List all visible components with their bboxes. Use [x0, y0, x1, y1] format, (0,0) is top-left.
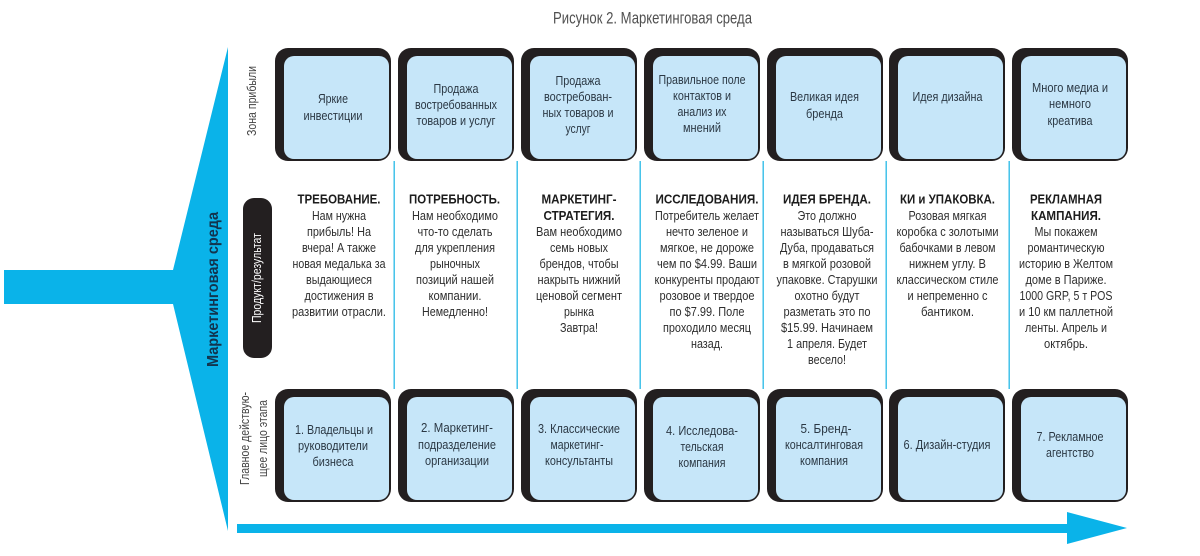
top card 7: profit zone	[1012, 48, 1128, 161]
text block 3: marketing strategy: СТРАТЕГИЯ.	[544, 208, 614, 223]
row label: product and result pill: Продукт/результат	[249, 233, 264, 323]
text block 7: advertising campaign: ленты. Апрель и	[1025, 320, 1107, 335]
top card 4: profit zone: Правильное поле	[658, 72, 746, 87]
text block 1: requirement	[292, 192, 386, 319]
text block 7: advertising campaign: РЕКЛАМНАЯ	[1030, 192, 1102, 206]
top card 1: profit zone	[275, 48, 391, 161]
bottom card 5: brand consulting company	[767, 389, 883, 502]
text block 3: marketing strategy: семь новых	[550, 240, 608, 255]
text block 7: advertising campaign: романтическую	[1028, 240, 1105, 255]
text block 4: research: Потребитель желает	[655, 208, 759, 223]
bottom card 6: design studio: 6. Дизайн-студия	[904, 437, 990, 452]
row label: main actor of the stage: Главное действую-	[237, 392, 252, 485]
text block 5: brand idea: Дуба, продаваться	[780, 240, 874, 255]
text block 5: brand idea: в мягкой розовой	[783, 256, 871, 271]
text block 4: research	[654, 192, 760, 351]
text block 4: research: по $7.99. Поле	[670, 304, 744, 319]
top card 3: profit zone: ных товаров и	[542, 105, 614, 120]
title: Рисунок 2. Маркетинговая среда	[553, 10, 753, 28]
text block 7: advertising campaign: историю в Желтом	[1019, 256, 1113, 271]
text block 2: need: рыночных	[430, 256, 480, 271]
text block 2: need: позиций нашей	[416, 272, 494, 287]
text block 7: advertising campaign	[1019, 192, 1113, 351]
bottom card 5: brand consulting company: консалтинговая	[785, 437, 863, 452]
text block 3: marketing strategy: ценовой сегмент	[536, 288, 622, 303]
text block 3: marketing strategy: МАРКЕТИНГ-	[542, 192, 616, 206]
text block 4: research: назад.	[691, 336, 723, 351]
text block 5: brand idea: Это должно	[798, 208, 856, 223]
top card 1: profit zone: Яркие	[318, 91, 348, 106]
bottom card 3: classic marketing consultants: консультанты	[545, 453, 613, 468]
text block 2: need: Нам необходимо	[412, 208, 498, 223]
bottom card 1: owners and managers: руководители	[298, 438, 368, 453]
top card 3: profit zone: услуг	[566, 121, 591, 136]
text block 1: requirement: вчера! А также	[302, 240, 376, 255]
text block 2: need: что-то сделать	[418, 224, 493, 239]
bottom card 3: classic marketing consultants: маркетинг-	[550, 437, 604, 452]
text block 2: need: Немедленно!	[422, 304, 488, 319]
text block 6: corporate identity and packaging: коробка с золотыми	[896, 224, 998, 239]
text block 4: research: проходило месяц	[663, 320, 751, 335]
top card 6: profit zone: Идея дизайна	[912, 89, 983, 104]
arrow: horizontal process direction	[237, 512, 1127, 544]
text block 5: brand idea: $15.99. Начинаем	[781, 320, 873, 335]
text block 2: need: ПОТРЕБНОСТЬ.	[409, 192, 500, 206]
text block 3: marketing strategy: Завтра!	[560, 320, 598, 335]
top card 5: profit zone: Великая идея	[790, 89, 859, 104]
text block 2: need	[409, 192, 500, 319]
column separators	[394, 161, 1010, 389]
text block 6: corporate identity and packaging: КИ и УПАКОВКА.	[900, 192, 995, 206]
top card 4: profit zone: мнений	[683, 120, 721, 135]
text block 1: requirement: прибыль! На	[307, 224, 372, 239]
top card 6: profit zone	[889, 48, 1005, 161]
text block 1: requirement: ТРЕБОВАНИЕ.	[298, 192, 380, 206]
text block 2: need: компании.	[428, 288, 482, 303]
text block 3: marketing strategy: брендов, чтобы	[540, 256, 618, 271]
text block 5: brand idea: разметать это по	[784, 304, 870, 319]
top card 2: profit zone: Продажа	[434, 81, 479, 96]
top card 2: profit zone: востребованных	[415, 97, 497, 112]
top card 7: profit zone: креатива	[1048, 113, 1093, 128]
top card 2: profit zone	[398, 48, 514, 161]
text block 6: corporate identity and packaging	[896, 192, 998, 319]
text block 4: research: конкуренты продают	[654, 272, 760, 287]
text block 3: marketing strategy: накрыть нижний	[538, 272, 620, 287]
text block 7: advertising campaign: КАМПАНИЯ.	[1031, 208, 1101, 223]
text block 3: marketing strategy	[536, 192, 622, 335]
bottom card 2: marketing department: подразделение	[418, 437, 496, 452]
text block 4: research: мягкое, не дороже	[660, 240, 754, 255]
bottom card 6: design studio	[889, 389, 1005, 502]
top card 4: profit zone	[644, 48, 760, 161]
bottom card 4: research company: компания	[678, 455, 726, 470]
top card 5: profit zone: бренда	[806, 106, 844, 121]
text block 7: advertising campaign: октябрь.	[1044, 336, 1088, 351]
text block 3: marketing strategy: рынка	[564, 304, 595, 319]
text block 1: requirement: достижения в	[304, 288, 374, 303]
text block 1: requirement: Нам нужна	[312, 208, 367, 223]
top card 7: profit zone: Много медиа и	[1032, 80, 1108, 95]
text block 6: corporate identity and packaging: и непременно с	[908, 288, 988, 303]
bottom card 1: owners and managers: 1. Владельцы и	[295, 422, 373, 437]
top card 4: profit zone: контактов и	[673, 88, 731, 103]
heading: marketing environment vertical label: Маркетинговая среда	[205, 212, 222, 367]
text block 6: corporate identity and packaging: бантиком.	[921, 304, 974, 319]
top card 2: profit zone: товаров и услуг	[416, 113, 496, 128]
row label: main actor of the stage	[237, 392, 270, 485]
bottom card 2: marketing department	[398, 389, 514, 502]
text block 7: advertising campaign: Мы покажем	[1034, 224, 1098, 239]
bottom card 4: research company	[644, 389, 760, 502]
text block 5: brand idea: ИДЕЯ БРЕНДА.	[783, 192, 871, 206]
top card 7: profit zone: немного	[1049, 96, 1091, 111]
text block 6: corporate identity and packaging: нижнем углу. В	[909, 256, 986, 271]
text block 3: marketing strategy: Вам необходимо	[536, 224, 622, 239]
text block 1: requirement: развитии отрасли.	[292, 304, 386, 319]
top card 3: profit zone: Продажа	[556, 73, 601, 88]
row label: profit zone: Зона прибыли	[244, 66, 259, 136]
text block 6: corporate identity and packaging: классическом стиле	[896, 272, 998, 287]
text block 5: brand idea	[776, 192, 878, 367]
text block 4: research: ИССЛЕДОВАНИЯ.	[656, 192, 758, 206]
bottom card 5: brand consulting company: компания	[800, 453, 848, 468]
text block 1: requirement: выдающиеся	[306, 272, 372, 287]
top card 5: profit zone	[767, 48, 883, 161]
text block 5: brand idea: охотно будут	[794, 288, 860, 303]
text block 2: need: для укрепления	[415, 240, 495, 255]
text block 5: brand idea: упаковке. Старушки	[776, 272, 878, 287]
row label: product and result pill	[243, 198, 272, 358]
bottom card 1: owners and managers	[275, 389, 391, 502]
text block 6: corporate identity and packaging: бабочками в левом	[900, 240, 996, 255]
bottom card 4: research company: 4. Исследова-	[666, 423, 738, 438]
text block 4: research: чем по $4.99. Ваши	[657, 256, 757, 271]
bottom card 5: brand consulting company: 5. Бренд-	[800, 421, 852, 436]
top card 1: profit zone: инвестиции	[304, 108, 362, 123]
text block 5: brand idea: называться Шуба-	[780, 224, 874, 239]
text block 1: requirement: новая медалька за	[292, 256, 386, 271]
bottom card 1: owners and managers: бизнеса	[312, 454, 354, 469]
text block 7: advertising campaign: доме в Париже.	[1026, 272, 1106, 287]
bottom card 2: marketing department: 2. Маркетинг-	[421, 420, 493, 435]
text block 4: research: нечто зеленое и	[666, 224, 748, 239]
top card 3: profit zone: востребован-	[544, 89, 612, 104]
row label: main actor of the stage: щее лицо этапа	[255, 399, 270, 477]
text block 5: brand idea: весело!	[808, 352, 846, 367]
top card 3: profit zone	[521, 48, 637, 161]
text block 6: corporate identity and packaging: Розовая мягкая	[908, 208, 986, 223]
bottom card 7: advertising agency: 7. Рекламное	[1036, 429, 1104, 444]
text block 7: advertising campaign: 1000 GRP, 5 т POS	[1020, 288, 1113, 303]
text block 7: advertising campaign: и 10 км паллетной	[1019, 304, 1113, 319]
text block 4: research: розовое и твердое	[660, 288, 754, 303]
bottom card 3: classic marketing consultants: 3. Классические	[538, 421, 620, 436]
arrow: marketing environment triangle pointing into the chart	[4, 47, 228, 531]
bottom card 2: marketing department: организации	[425, 453, 489, 468]
bottom card 7: advertising agency	[1012, 389, 1128, 502]
text block 5: brand idea: 1 апреля. Будет	[787, 336, 867, 351]
bottom card 3: classic marketing consultants	[521, 389, 637, 502]
top card 4: profit zone: анализ их	[678, 104, 727, 119]
bottom card 7: advertising agency: агентство	[1046, 445, 1094, 460]
bottom card 4: research company: тельская	[680, 439, 724, 454]
